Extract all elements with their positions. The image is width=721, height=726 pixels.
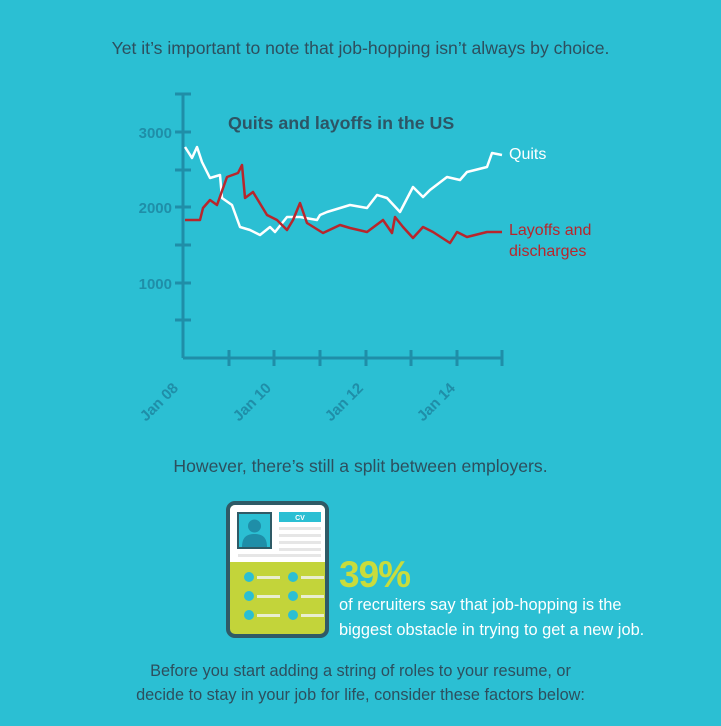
y labels: 3000: [139, 125, 172, 142]
chart title: Quits and layoffs in the US: [228, 113, 454, 133]
intro text: Yet it’s important to note that job-hopping isn’t always by choice.: [112, 38, 609, 58]
closing text: decide to stay in your job for life, consider these factors below:: [136, 686, 585, 704]
y labels: 2000: [139, 200, 172, 217]
x labels: Jan 14: [414, 379, 459, 425]
stat description: biggest obstacle in trying to get a new job.: [339, 621, 644, 639]
x labels: Jan 12: [322, 380, 367, 425]
series labels: Quits: [509, 146, 546, 163]
icon: CV card: CV: [295, 515, 305, 522]
quits line: [185, 147, 502, 235]
x labels: Jan 08: [137, 380, 182, 425]
closing text: Before you start adding a string of roles to your resume, or: [150, 662, 571, 680]
stat description: of recruiters say that job-hopping is the: [339, 596, 621, 614]
y labels: 1000: [139, 276, 172, 293]
x labels: [137, 379, 459, 425]
stat description: [339, 596, 644, 639]
layoffs line: [185, 165, 502, 243]
line chart: [137, 92, 591, 425]
stat: 39%: 39%: [339, 554, 410, 595]
axes: [175, 94, 502, 366]
x labels: Jan 10: [230, 380, 275, 425]
line chart: Layoffs and: [509, 222, 591, 239]
line chart: discharges: [509, 243, 586, 260]
y labels: [139, 125, 172, 293]
icon: CV card: [226, 501, 329, 638]
closing text: [136, 662, 585, 704]
split text: However, there’s still a split between employers.: [173, 456, 548, 476]
